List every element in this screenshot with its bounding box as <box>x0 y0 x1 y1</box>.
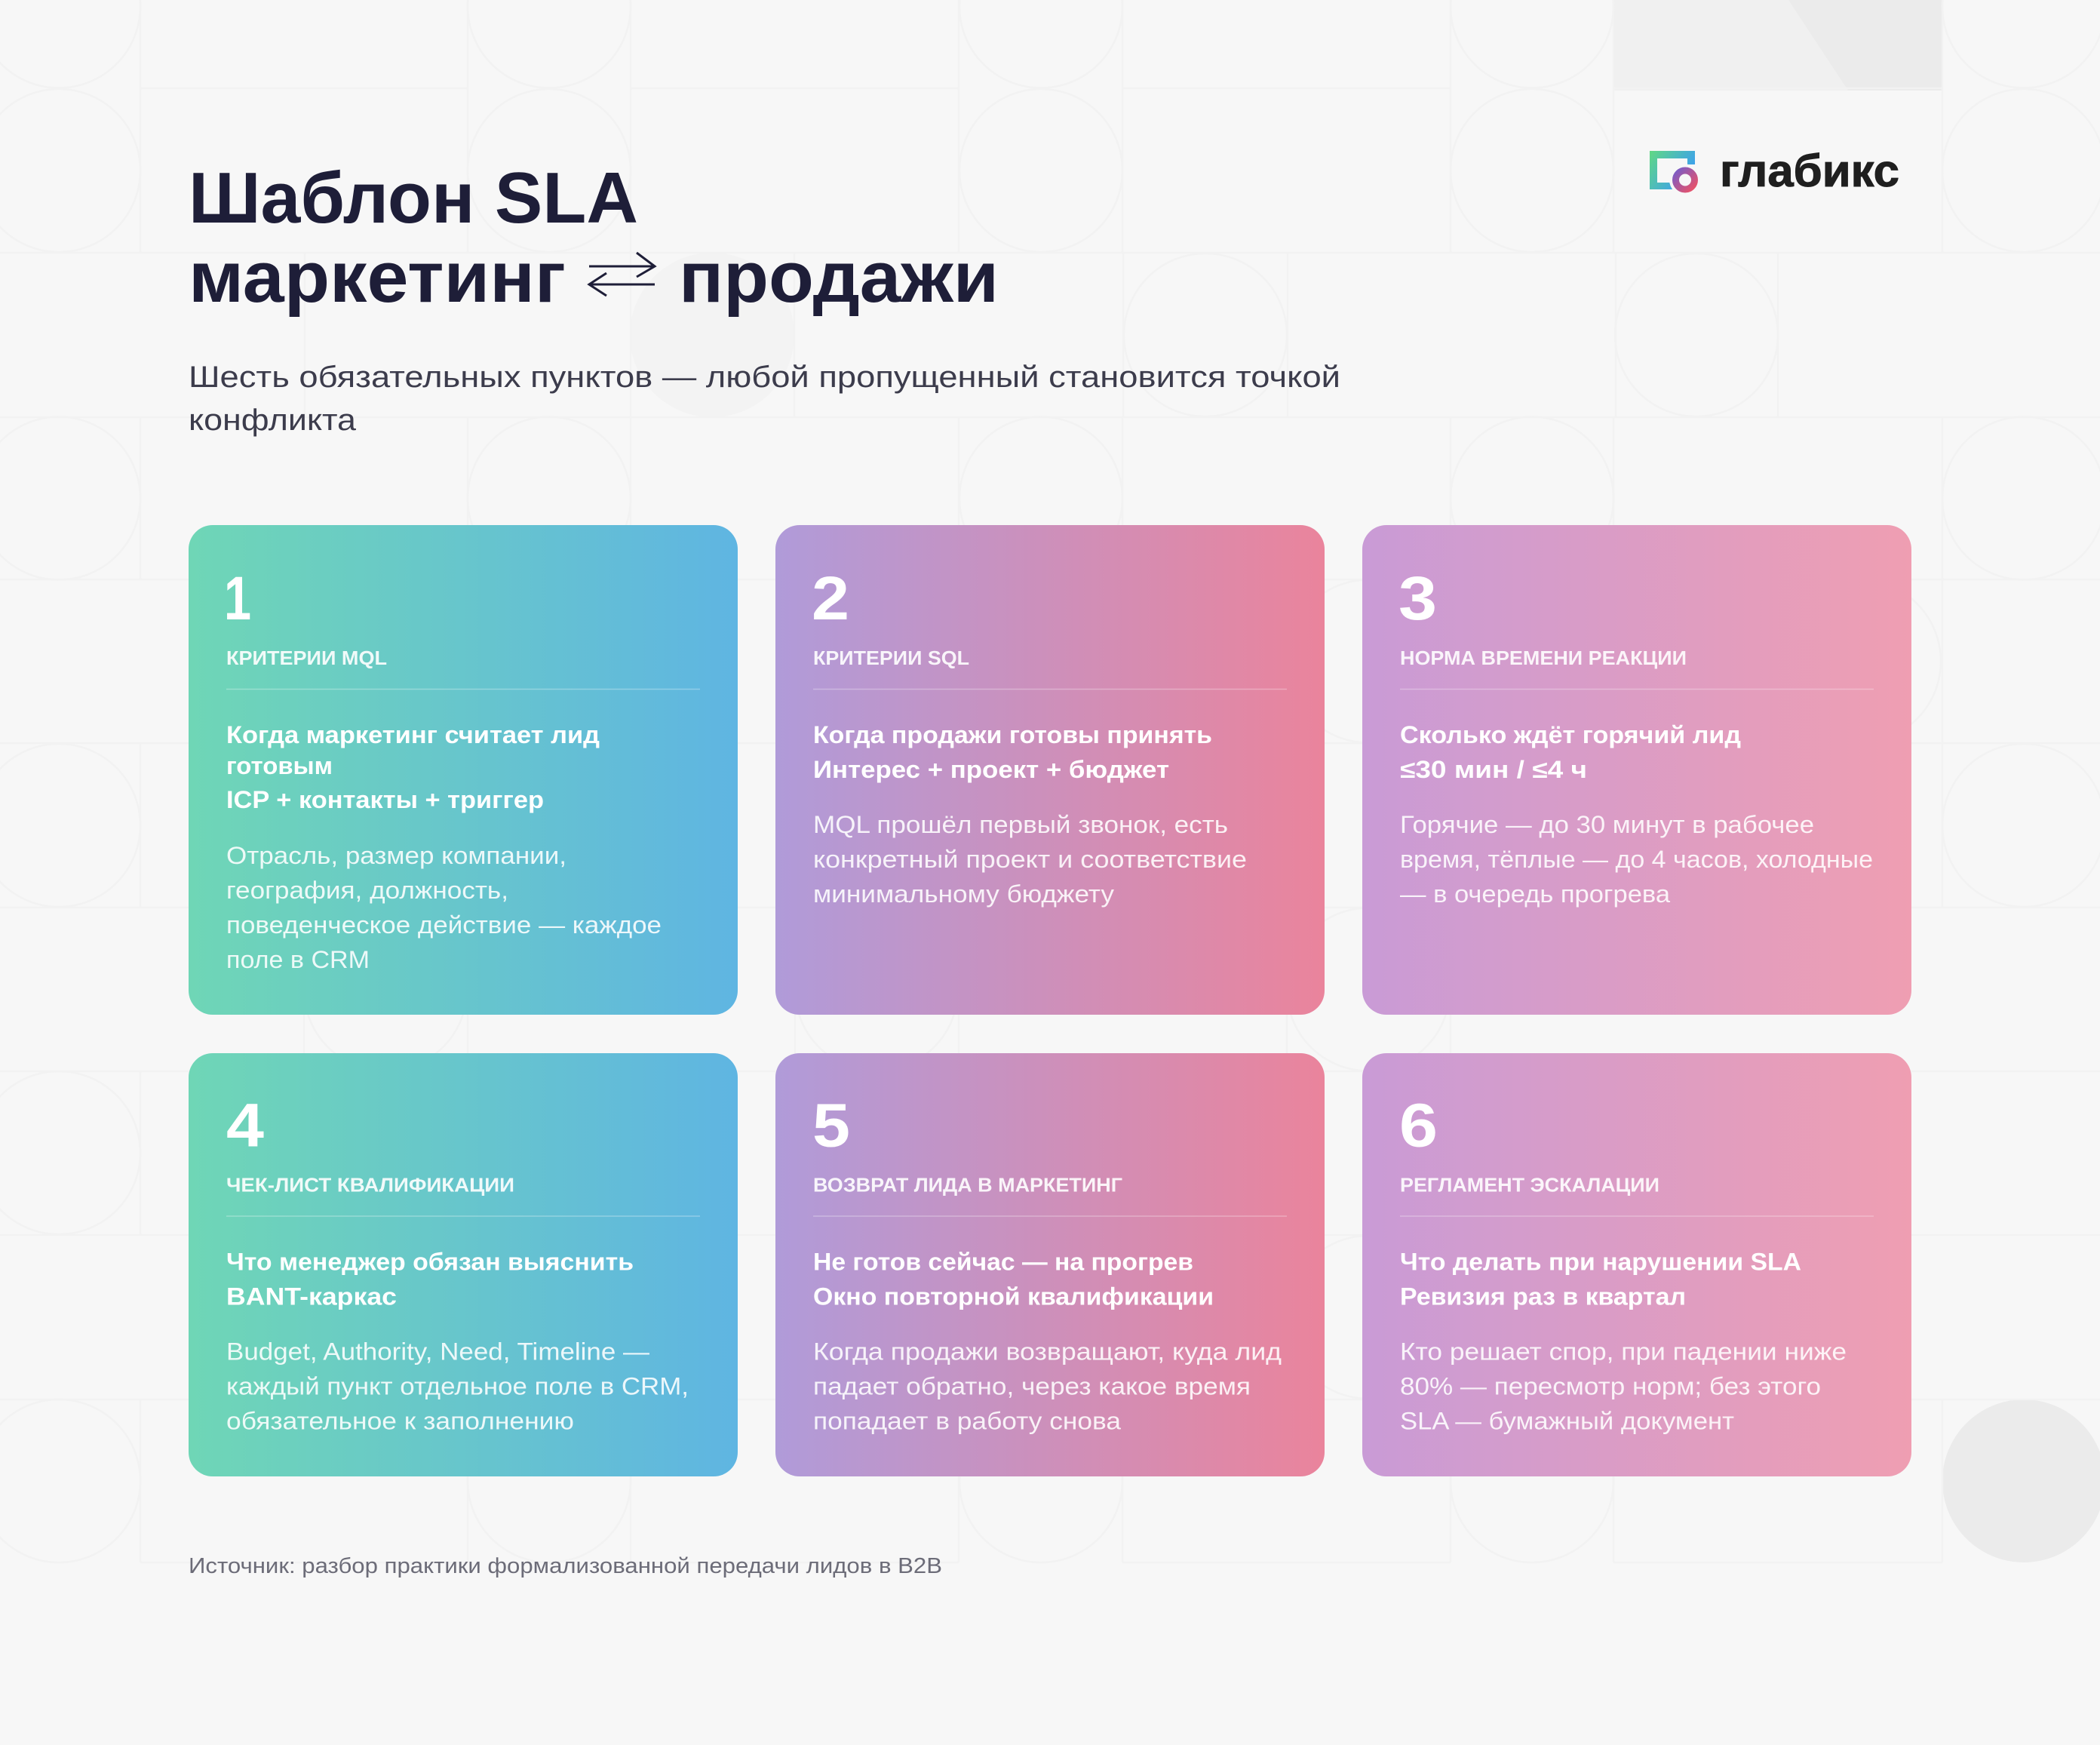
card 3 body: время, тёплые — до 4 часов, холодные <box>1400 846 1873 873</box>
logo: глабикс: глабикс <box>1720 146 1899 196</box>
card 2 body: минимальному бюджету <box>813 880 1114 908</box>
card 3: норма времени реакции: НОРМА ВРЕМЕНИ РЕАКЦИИ <box>1400 647 1687 669</box>
card 4 heading: BANT-каркас <box>226 1283 397 1310</box>
card 5 heading: Не готов сейчас — на прогрев <box>813 1248 1193 1275</box>
card 3: норма времени реакции <box>1362 525 1911 1015</box>
card 1 body <box>226 842 662 973</box>
card 6 body <box>1400 1338 1847 1435</box>
card 2: критерии SQL: КРИТЕРИИ SQL <box>813 647 969 669</box>
card 2 body <box>813 811 1247 908</box>
card 3 body: Горячие — до 30 минут в рабочее <box>1400 811 1814 838</box>
card 1 body: поведенческое действие — каждое <box>226 911 662 939</box>
card 1 heading <box>226 721 600 813</box>
card 6 body: Кто решает спор, при падении ниже <box>1400 1338 1847 1366</box>
card 6 body: SLA — бумажный документ <box>1400 1408 1734 1435</box>
card 3 heading <box>1400 721 1741 783</box>
card 3 heading: ≤30 мин / ≤4 ч <box>1400 756 1587 783</box>
card 2 body: MQL прошёл первый звонок, есть <box>813 811 1228 838</box>
card 1 body: Отрасль, размер компании, <box>226 842 566 869</box>
subtitle: Шесть обязательных пунктов — любой пропущенный становится точкой <box>189 361 1340 394</box>
card 4 heading <box>226 1248 634 1310</box>
card 6 heading: Ревизия раз в квартал <box>1400 1283 1686 1310</box>
card 4 body: обязательное к заполнению <box>226 1408 574 1435</box>
card 5: возврат лида в маркетинг <box>775 1053 1325 1476</box>
card 6 body: 80% — пересмотр норм; без этого <box>1400 1373 1821 1400</box>
card 4 heading: Что менеджер обязан выяснить <box>226 1248 634 1275</box>
card 6 heading <box>1400 1248 1801 1310</box>
card 5 body <box>813 1338 1282 1435</box>
card 1: критерии MQL: 1 <box>224 564 251 633</box>
subtitle: конфликта <box>189 404 357 437</box>
card 6 heading: Что делать при нарушении SLA <box>1400 1248 1801 1275</box>
logo: глабикс <box>1650 146 1899 196</box>
card 5 heading: Окно повторной квалификации <box>813 1283 1214 1310</box>
card 1 heading: готовым <box>226 752 333 779</box>
title: Шаблон SLA <box>189 158 638 238</box>
title <box>189 158 999 318</box>
card 1 heading: ICP + контакты + триггер <box>226 786 544 813</box>
card 4: чек-лист квалификации <box>189 1053 738 1476</box>
card 5: возврат лида в маркетинг: 5 <box>812 1091 850 1160</box>
card 4 body: Budget, Authority, Need, Timeline — <box>226 1338 649 1366</box>
card 1: критерии MQL <box>189 525 738 1015</box>
card 1 heading: Когда маркетинг считает лид <box>226 721 600 748</box>
card 6: регламент эскалации: РЕГЛАМЕНТ ЭСКАЛАЦИИ <box>1400 1174 1659 1197</box>
card 1 body: география, должность, <box>226 877 508 904</box>
card 1 body: поле в CRM <box>226 946 370 973</box>
card 5 body: падает обратно, через какое время <box>813 1373 1251 1400</box>
card 1: критерии MQL: КРИТЕРИИ MQL <box>226 647 387 669</box>
card 5: возврат лида в маркетинг: ВОЗВРАТ ЛИДА В МАРКЕТИНГ <box>813 1174 1122 1197</box>
card 3 body: — в очередь прогрева <box>1400 880 1670 908</box>
card 5 heading <box>813 1248 1214 1310</box>
title: продажи <box>679 237 999 318</box>
card 3 body <box>1400 811 1873 908</box>
icon: two-way arrows <box>589 253 655 296</box>
card 2: критерии SQL <box>775 525 1325 1015</box>
card 4 body: каждый пункт отдельное поле в CRM, <box>226 1373 689 1400</box>
card 4 body <box>226 1338 689 1435</box>
card 3 heading: Сколько ждёт горячий лид <box>1400 721 1741 748</box>
source note: Источник: разбор практики формализованной передачи лидов в B2B <box>189 1554 942 1578</box>
title: маркетинг <box>189 237 566 318</box>
card 2: критерии SQL: 2 <box>812 564 849 633</box>
card 2 heading <box>813 721 1212 783</box>
subtitle <box>189 361 1340 437</box>
card 2 heading: Когда продажи готовы принять <box>813 721 1212 748</box>
card 5 body: попадает в работу снова <box>813 1408 1121 1435</box>
icon: logo frame and ring <box>1650 151 1701 196</box>
card 4: чек-лист квалификации: ЧЕК-ЛИСТ КВАЛИФИКАЦИИ <box>226 1174 514 1197</box>
card 6: регламент эскалации <box>1362 1053 1911 1476</box>
card 2 body: конкретный проект и соответствие <box>813 846 1247 873</box>
card 3: норма времени реакции: 3 <box>1398 564 1437 633</box>
card 2 heading: Интерес + проект + бюджет <box>813 756 1169 783</box>
card 6: регламент эскалации: 6 <box>1399 1091 1438 1160</box>
card 4: чек-лист квалификации: 4 <box>226 1091 264 1160</box>
card 5 body: Когда продажи возвращают, куда лид <box>813 1338 1282 1366</box>
